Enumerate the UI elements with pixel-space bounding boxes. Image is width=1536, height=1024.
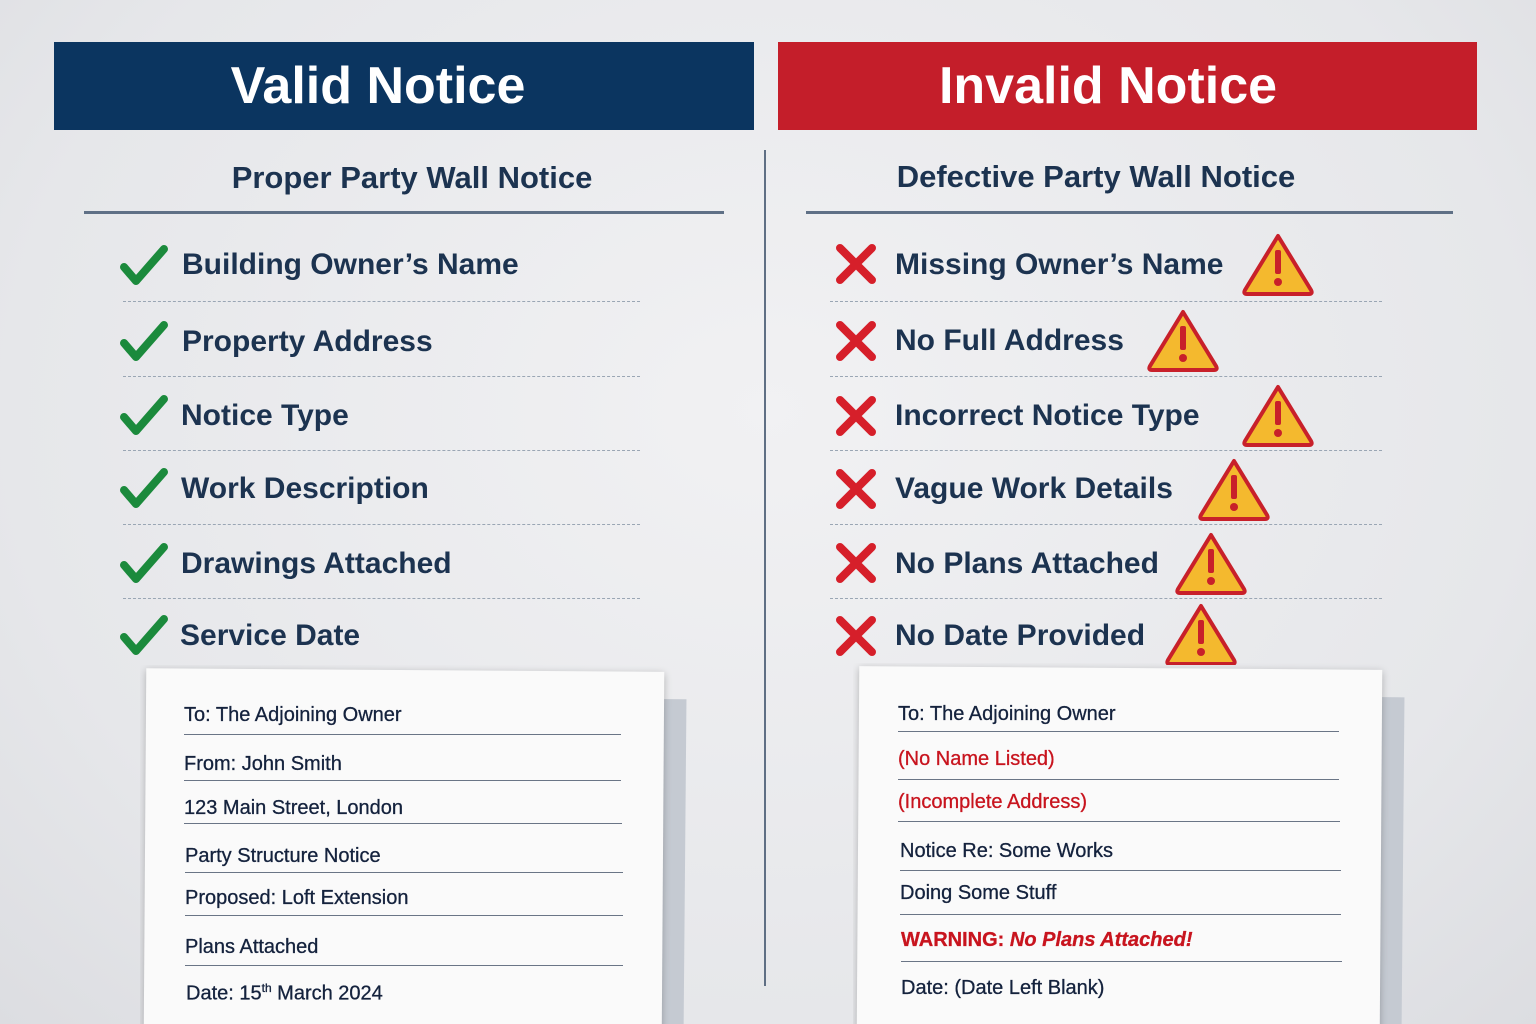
- document: valid notice: Party Structure Notice: [185, 845, 381, 867]
- document: valid notice: Date: 15th March 2024: [186, 981, 383, 1005]
- document: invalid notice: [853, 664, 1404, 1024]
- header: invalid notice: Invalid Notice: [939, 57, 1277, 115]
- document: invalid notice: (Incomplete Address): [898, 791, 1087, 813]
- item: Notice Type: [181, 399, 349, 432]
- header: valid notice: [54, 42, 754, 130]
- document: valid notice: To: The Adjoining Owner: [184, 704, 402, 726]
- document: invalid notice: Doing Some Stuff: [900, 882, 1056, 904]
- item: Building Owner’s Name: [182, 248, 519, 281]
- item: No Full Address: [895, 324, 1124, 357]
- document: valid notice: Plans Attached: [185, 936, 318, 958]
- header: invalid notice: [778, 42, 1477, 130]
- item: Service Date: [180, 619, 360, 652]
- item: Drawings Attached: [181, 547, 452, 580]
- panel: valid checklist: [120, 245, 640, 655]
- item: Work Description: [181, 472, 429, 505]
- document: valid notice: From: John Smith: [184, 753, 342, 775]
- document: valid notice: 123 Main Street, London: [184, 797, 403, 819]
- panel: invalid checklist: [830, 234, 1382, 665]
- item: No Plans Attached: [895, 547, 1159, 580]
- subheading: proper party wall notice: Proper Party Wall Notice: [232, 160, 592, 195]
- header: valid notice: Valid Notice: [231, 57, 525, 115]
- item: Missing Owner’s Name: [895, 248, 1223, 281]
- document: invalid notice: Date: (Date Left Blank): [901, 977, 1104, 999]
- item: Property Address: [182, 325, 433, 358]
- document: invalid notice: To: The Adjoining Owner: [898, 703, 1116, 725]
- vertical divider: [764, 150, 766, 986]
- document: invalid notice: Notice Re: Some Works: [900, 840, 1113, 862]
- document: invalid notice: WARNING: No Plans Attached!: [901, 929, 1193, 951]
- document: valid notice: [140, 666, 686, 1024]
- subheading: defective party wall notice: Defective Party Wall Notice: [897, 159, 1295, 194]
- item: No Date Provided: [895, 619, 1145, 652]
- document: valid notice: Proposed: Loft Extension: [185, 887, 408, 909]
- item: Vague Work Details: [895, 472, 1173, 505]
- item: Incorrect Notice Type: [895, 399, 1200, 432]
- document: invalid notice: (No Name Listed): [898, 748, 1055, 770]
